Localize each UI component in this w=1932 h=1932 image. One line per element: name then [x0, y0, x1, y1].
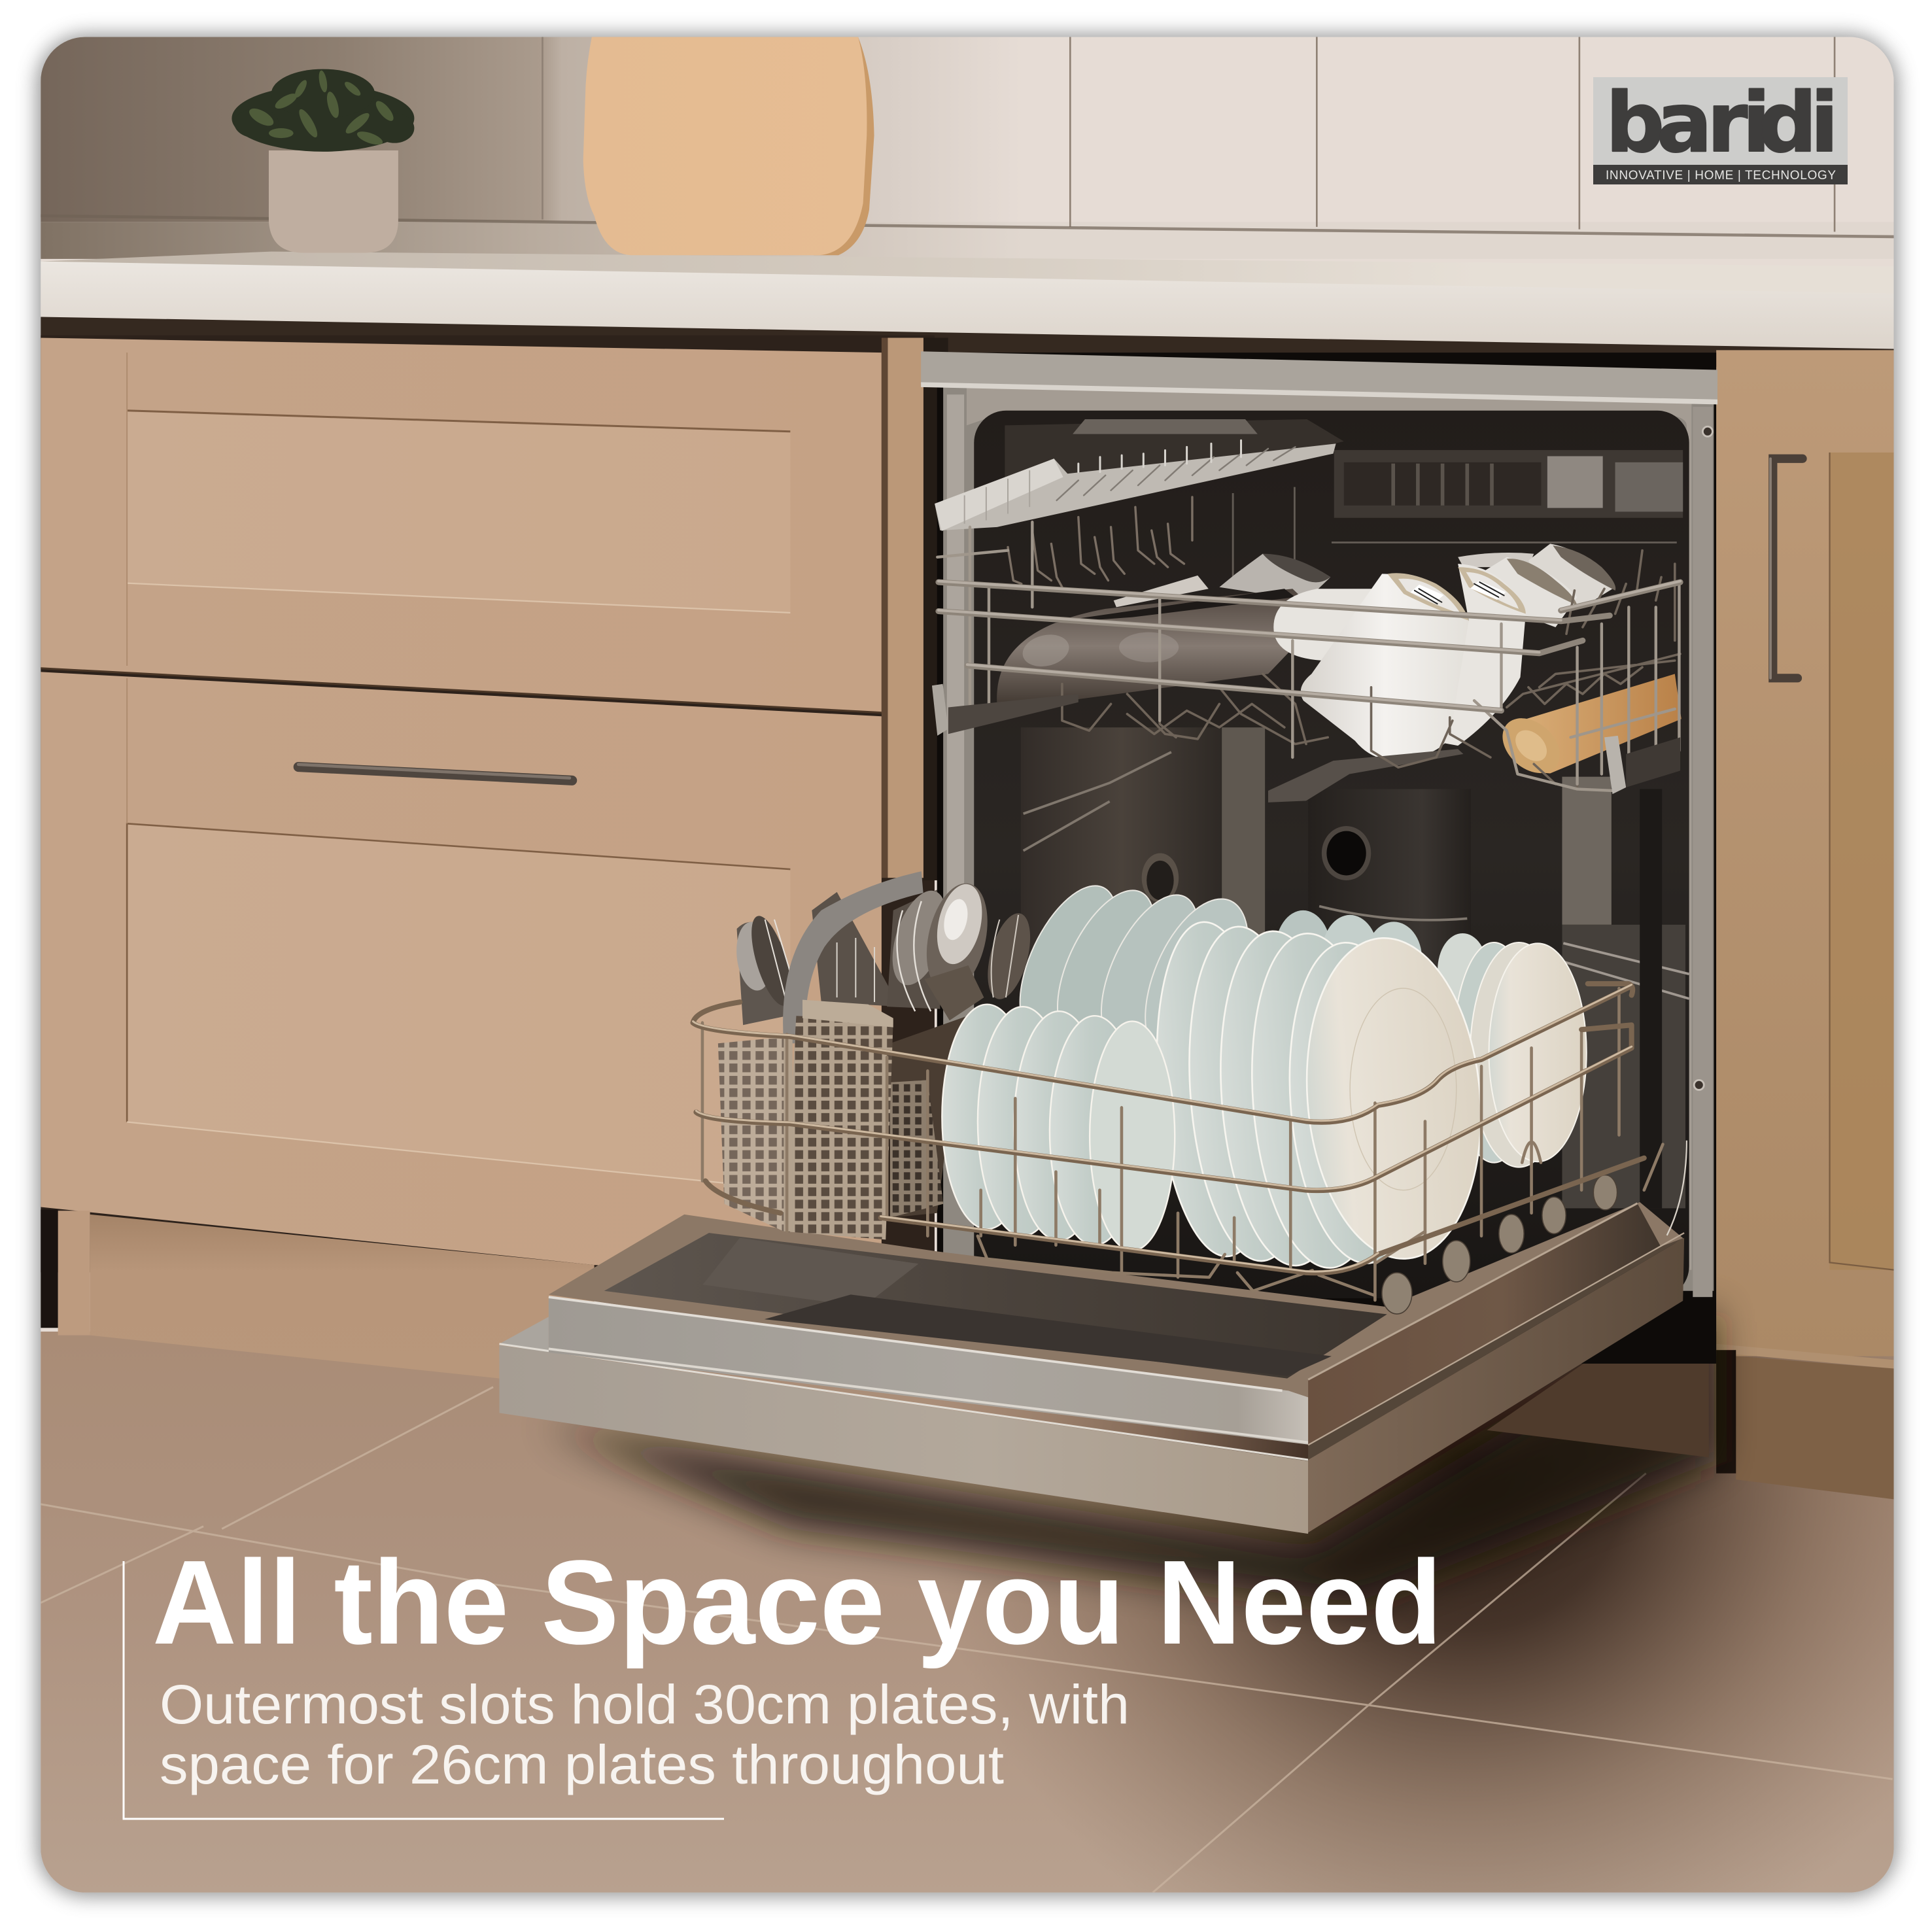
cabinet handle right — [1770, 458, 1803, 678]
rack rail clips — [932, 684, 1680, 794]
door rim side — [1308, 1203, 1661, 1445]
spray arm — [1268, 749, 1463, 802]
cup shelf — [935, 440, 1336, 531]
back plates — [1000, 878, 1488, 1067]
lower rack wires — [693, 984, 1663, 1300]
interior reflections — [1005, 419, 1689, 1208]
lower rack contents — [693, 871, 1663, 1314]
cabinet right — [1716, 350, 1894, 1499]
door front face — [499, 1345, 1308, 1534]
tub backing — [937, 353, 1716, 1364]
top rail — [921, 351, 1717, 402]
small plates — [942, 1005, 1175, 1251]
tub interior — [974, 411, 1689, 1298]
door front ledge — [499, 1317, 549, 1354]
basin — [604, 1233, 1387, 1379]
white mugs — [1273, 543, 1615, 760]
rolling pin — [1492, 674, 1682, 778]
counter top — [41, 252, 1894, 370]
frying pan — [997, 589, 1322, 704]
wheels — [1382, 1175, 1617, 1314]
cutlery basket — [718, 1000, 987, 1239]
subtitle line 2: space for 26cm plates throughout — [160, 1734, 1004, 1795]
drawer handle — [298, 765, 572, 780]
back mugs — [1114, 553, 1534, 607]
logo wordmark: baridi — [1606, 75, 1838, 171]
cutlery — [734, 871, 1038, 1043]
logo: baridi — [1593, 75, 1848, 184]
door rim front — [549, 1297, 1315, 1445]
cabinet toe kick — [41, 1209, 595, 1379]
rack tines back — [1008, 497, 1192, 587]
door shadow — [542, 1307, 1714, 1603]
icon: potted plant — [232, 69, 414, 252]
door open — [499, 1141, 1687, 1534]
dishwasher body — [921, 351, 1717, 1364]
large plates — [1146, 920, 1491, 1270]
subtitle line 1: Outermost slots hold 30cm plates, with — [160, 1674, 1130, 1735]
right plates — [1453, 942, 1587, 1167]
title: All the Space you Need — [152, 1535, 1442, 1669]
floor — [41, 1332, 1894, 1893]
kick plate — [1487, 1340, 1709, 1457]
door top surface — [549, 1202, 1684, 1406]
rack tines bottom — [1062, 551, 1680, 787]
door side lower face — [1308, 1238, 1684, 1532]
logo tagline: INNOVATIVE | HOME | TECHNOLOGY — [1606, 169, 1836, 182]
wall tiles — [41, 37, 1894, 259]
headline block — [124, 1535, 1442, 1819]
cabinet drawers left — [41, 336, 948, 1283]
tub frame — [943, 385, 1714, 1291]
door hinge arm — [1667, 1141, 1687, 1235]
upper rack — [932, 440, 1682, 802]
rack wires — [937, 522, 1680, 791]
frame line — [124, 1561, 724, 1819]
cutting board — [583, 37, 874, 255]
